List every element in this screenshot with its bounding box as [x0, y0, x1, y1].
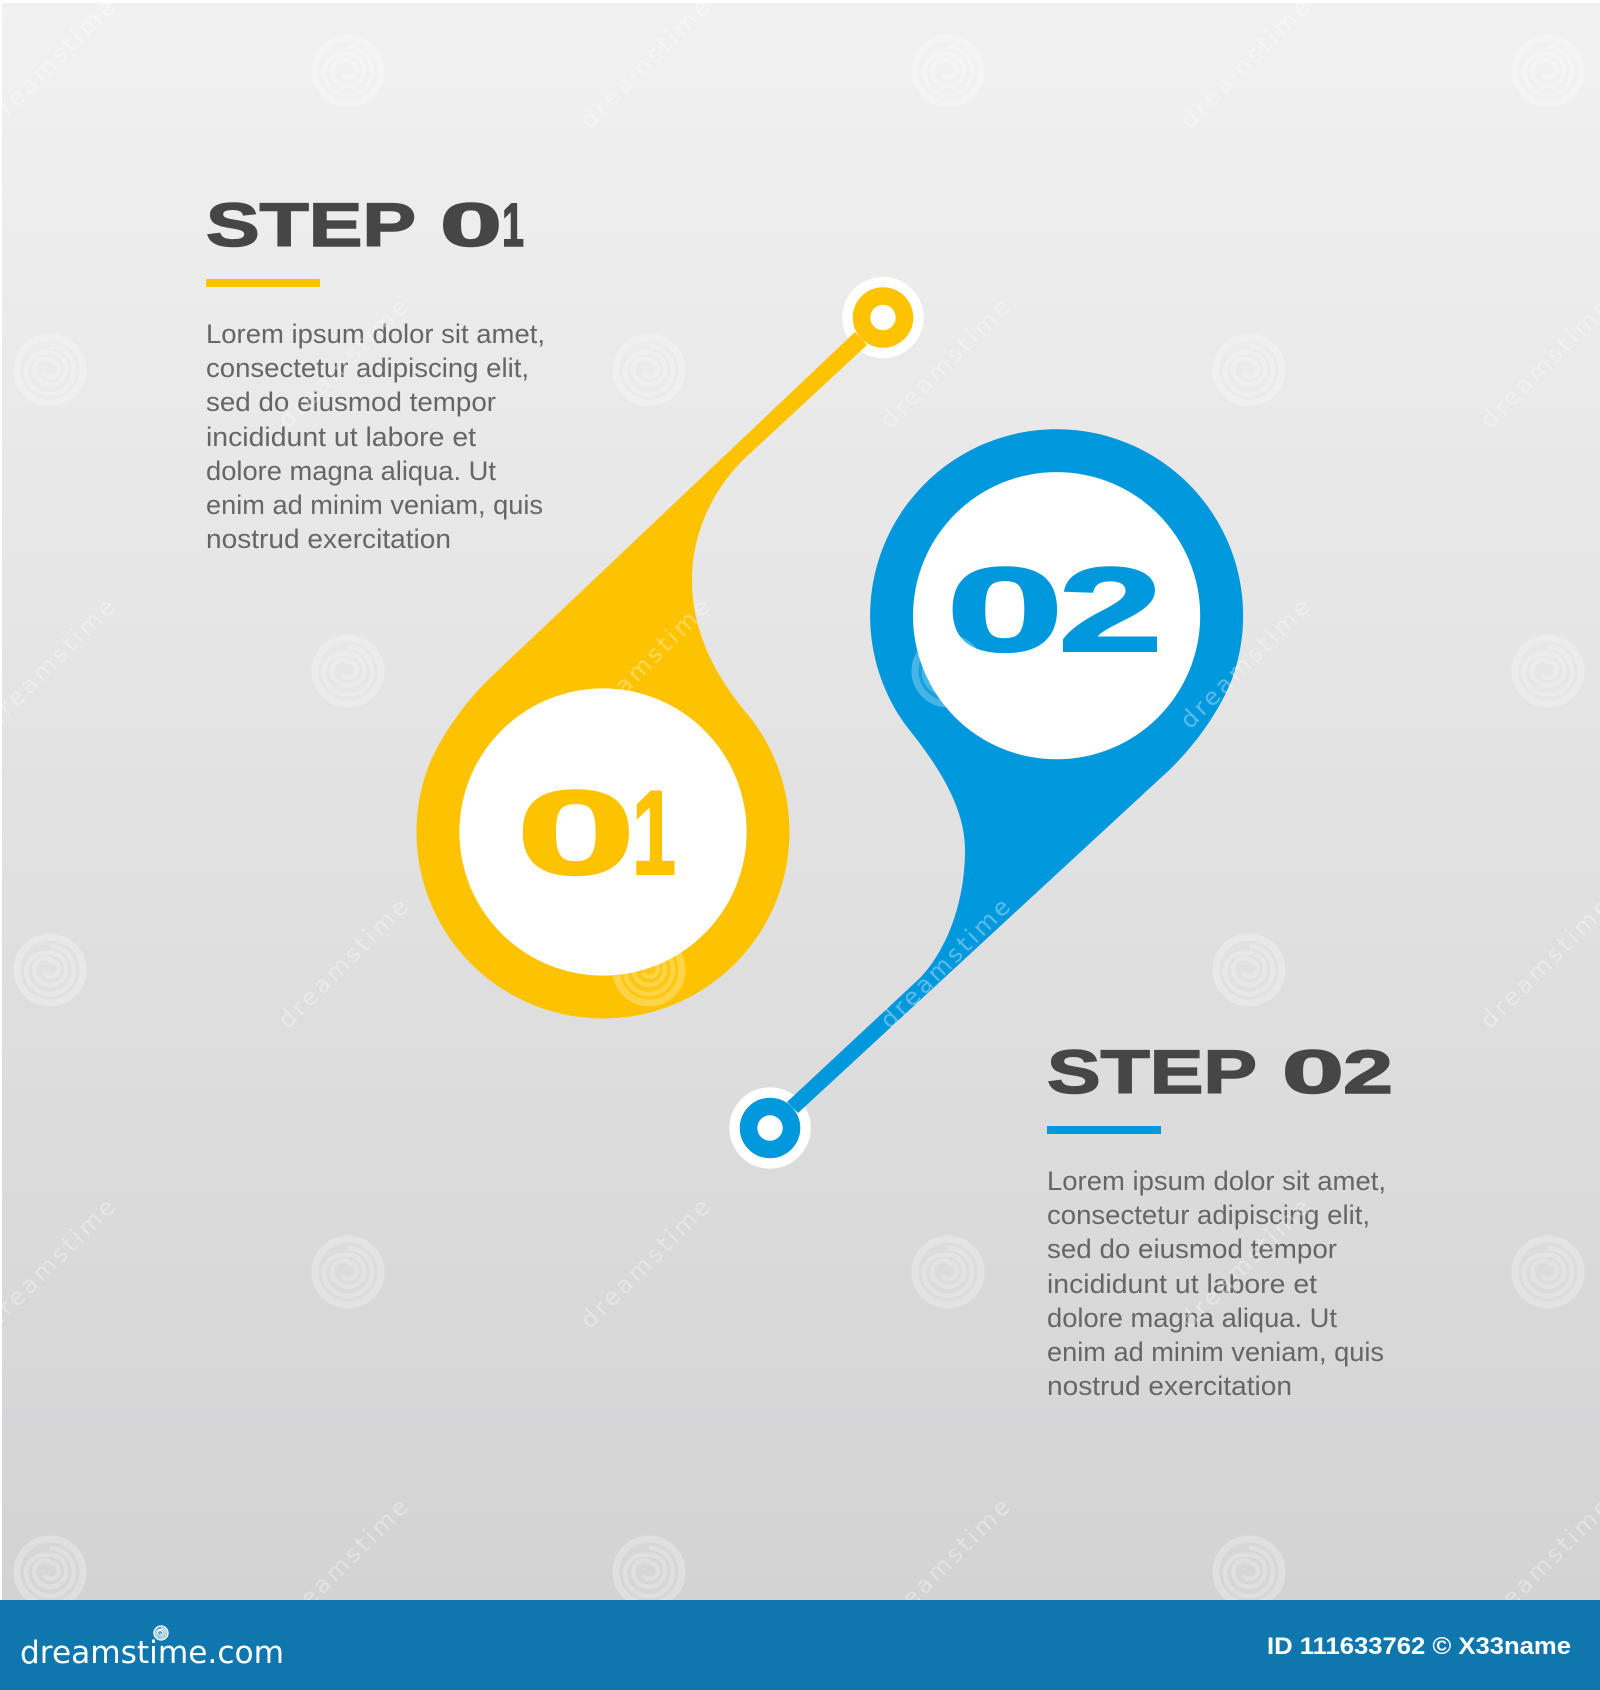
text block: step 01 description: incididunt ut labore et: [206, 422, 477, 452]
number: 01: [516, 766, 676, 900]
watermark: dreamstime text: dreamstime: [874, 293, 1016, 434]
marker: blue teardrop 02: [729, 429, 1243, 1169]
heading: step 02: 0: [1282, 1038, 1344, 1106]
heading: step 02: [1047, 1038, 1393, 1106]
panel: step 01 text: [206, 191, 545, 554]
heading: step 01: STEP: [206, 191, 416, 259]
number: 02: [946, 543, 1163, 677]
watermark: dreamstime text: dreamstime: [874, 1493, 1016, 1634]
text block: step 02 description: enim ad minim veniam, quis: [1047, 1337, 1384, 1367]
heading: step 01: 1: [502, 191, 524, 259]
text block: step 02 description: [1047, 1166, 1386, 1401]
number: 01: 1: [632, 766, 676, 900]
text block: step 01 description: enim ad minim veniam, quis: [206, 490, 543, 520]
text block: step 01 description: nostrud exercitation: [206, 524, 451, 554]
text block: step 01 description: consectetur adipiscing elit,: [206, 353, 529, 383]
text block: step 02 description: Lorem ipsum dolor sit amet,: [1047, 1166, 1386, 1196]
divider: step 01 underline: [206, 279, 320, 287]
text block: step 01 description: [206, 319, 545, 554]
number: 01: 0: [516, 766, 636, 900]
divider: step 02 underline: [1047, 1126, 1161, 1134]
watermark: dreamstime text: dreamstime: [574, 1193, 716, 1334]
text block: step 02 description: nostrud exercitation: [1047, 1371, 1292, 1401]
text block: step 01 description: Lorem ipsum dolor sit amet,: [206, 319, 545, 349]
watermark: dreamstime text: dreamstime: [574, 593, 716, 734]
watermark: dreamstime text: dreamstime: [1174, 593, 1316, 734]
heading: step 02: STEP: [1047, 1038, 1257, 1106]
text block: step 01 description: sed do eiusmod tempor: [206, 387, 496, 417]
watermark: dreamstime text: dreamstime: [1174, 1193, 1316, 1334]
heading: step 01: [206, 191, 524, 259]
footer image id: ID 111633762 © X33name: [1267, 1633, 1571, 1660]
heading: step 01: 0: [440, 191, 502, 259]
number: 02: 0: [946, 543, 1064, 677]
watermark: dreamstime text: dreamstime: [272, 293, 414, 434]
footer logo: dreamstime.com: [20, 1635, 284, 1671]
watermark: dreamstime text: dreamstime: [272, 1493, 414, 1634]
watermark: dreamstime text: dreamstime: [272, 893, 414, 1034]
panel: step 02 text: [1047, 1038, 1393, 1401]
footer bar: [0, 1600, 1600, 1690]
text block: step 02 description: incididunt ut labore et: [1047, 1269, 1318, 1299]
marker: yellow teardrop 01: [416, 277, 924, 1018]
text block: step 01 description: dolore magna aliqua. Ut: [206, 456, 496, 486]
text block: step 02 description: sed do eiusmod tempor: [1047, 1234, 1337, 1264]
watermark: dreamstime text: dreamstime: [874, 893, 1016, 1034]
text block: step 02 description: consectetur adipiscing elit,: [1047, 1200, 1370, 1230]
heading: step 02: 2: [1343, 1038, 1393, 1106]
text block: step 02 description: dolore magna aliqua. Ut: [1047, 1303, 1337, 1333]
number: 02: 2: [1058, 543, 1163, 677]
